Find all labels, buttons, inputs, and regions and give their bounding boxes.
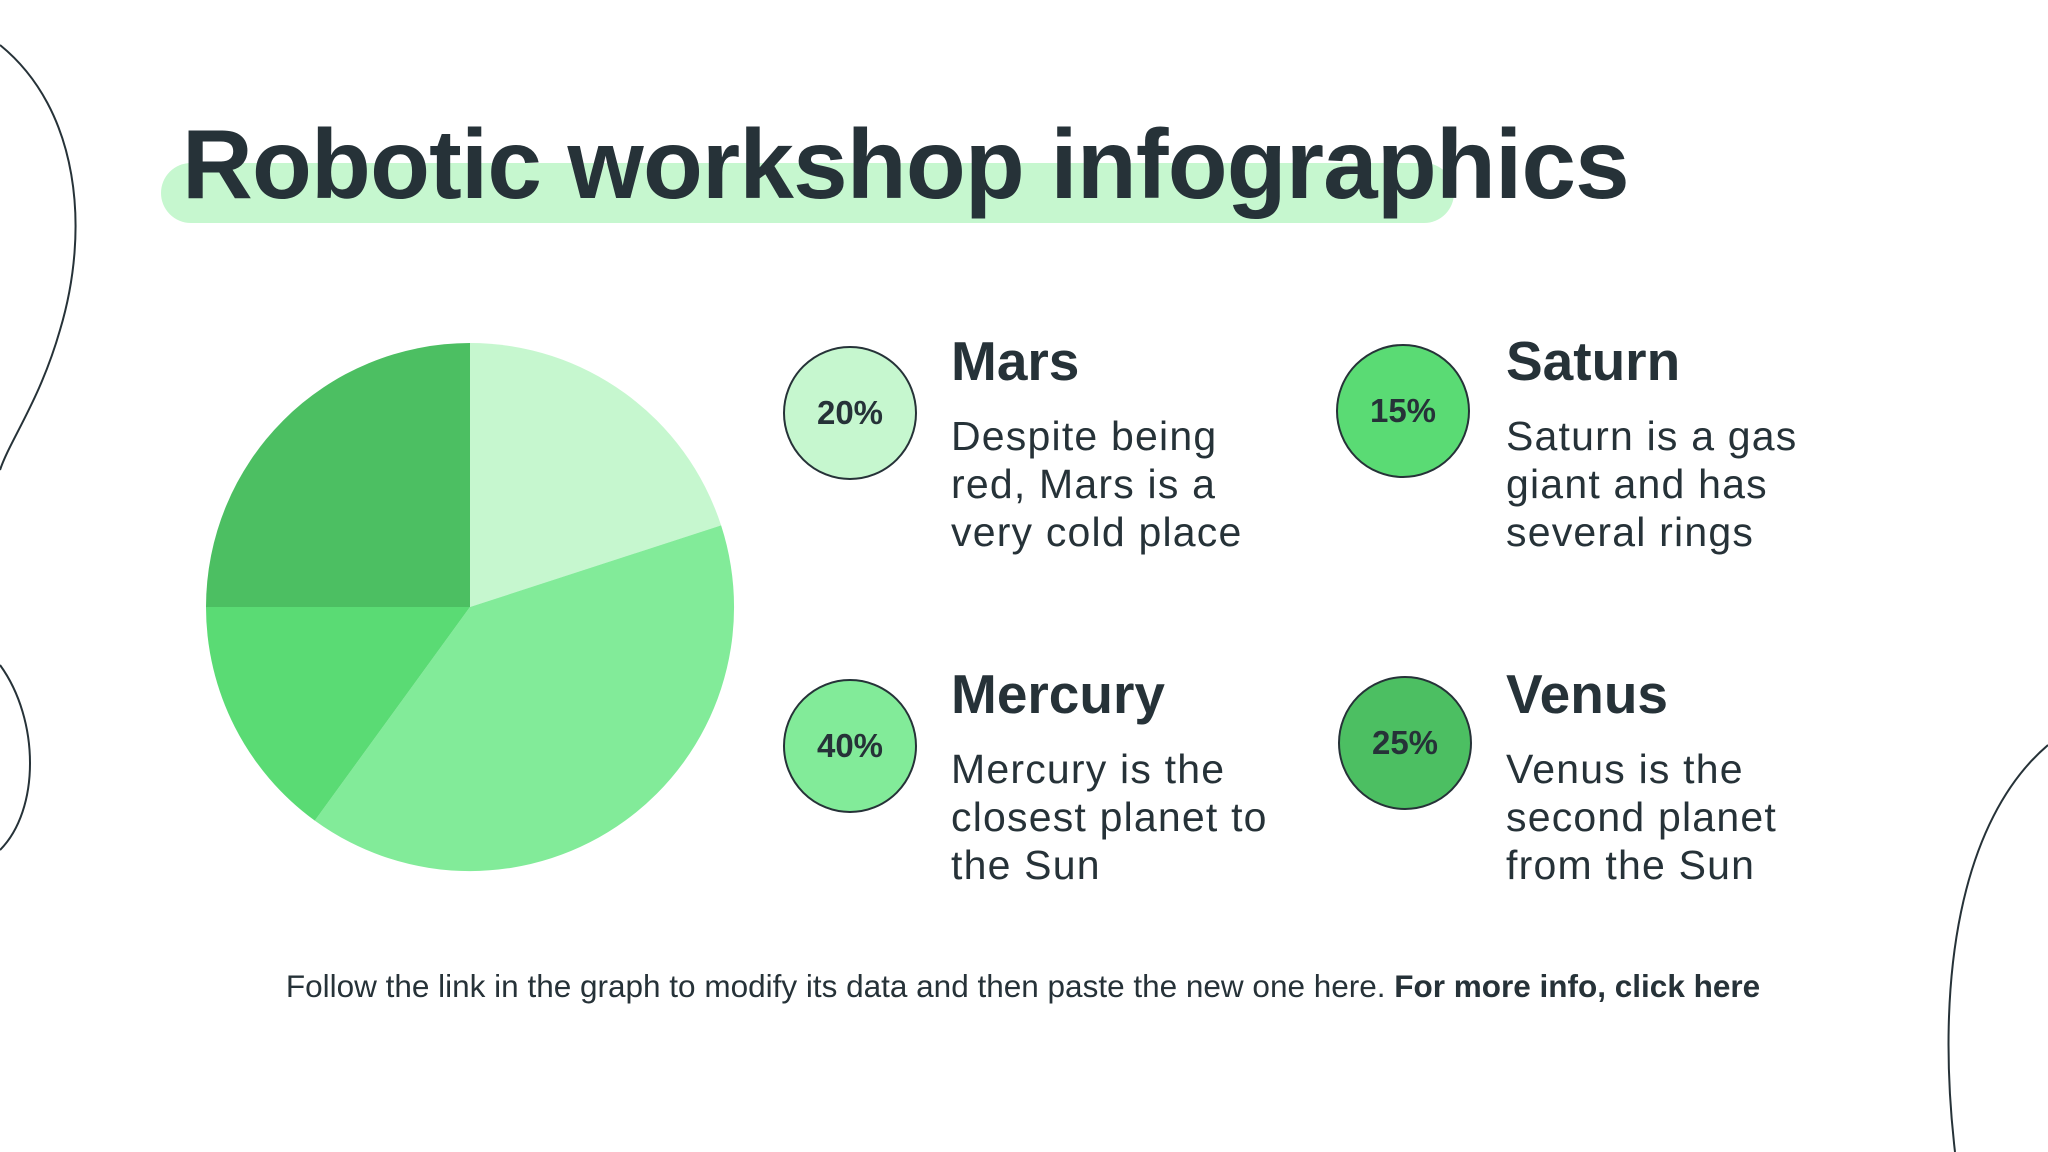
circle: Venus 25% [1338,676,1472,810]
text: Mars: Despite being [951,413,1217,459]
text: Saturn: Saturn is a gas [1506,413,1798,459]
circle: Saturn 15%: 15% [1370,392,1436,429]
text: Mars: Mars [951,330,1079,392]
circle: Saturn 15% [1336,344,1470,478]
text: Mercury: Mercury [951,663,1165,725]
text: Mercury: the Sun [951,842,1101,888]
text: Mercury [951,663,1268,888]
text: Saturn: giant and has [1506,461,1768,507]
text: Saturn: several rings [1506,509,1754,555]
text: Mercury: closest planet to [951,794,1268,840]
circle: Venus 25%: 25% [1372,724,1438,761]
circle: Mars 20%: 20% [817,394,883,431]
text: Venus: from the Sun [1506,842,1755,888]
text: Venus: Venus [1506,663,1668,725]
title: Robotic workshop infographics [182,109,1629,219]
circle: Mercury 40%: 40% [817,727,883,764]
text: Saturn [1506,330,1798,555]
pie chart [206,343,734,872]
text: Venus: Venus is the [1506,746,1744,792]
text: Venus: second planet [1506,794,1777,840]
text: Mars: very cold place [951,509,1242,555]
circle: Mars 20% [783,346,917,480]
footer: Follow the link in the graph to modify its data and then paste the new one here. For more info, click here [286,968,1760,1004]
circle: Mercury 40% [783,679,917,813]
text: Mercury: Mercury is the [951,746,1225,792]
title highlight [161,163,1454,223]
text: Mars: red, Mars is a [951,461,1216,507]
text: Venus [1506,663,1777,888]
text: Saturn: Saturn [1506,330,1680,392]
text: Mars [951,330,1242,555]
